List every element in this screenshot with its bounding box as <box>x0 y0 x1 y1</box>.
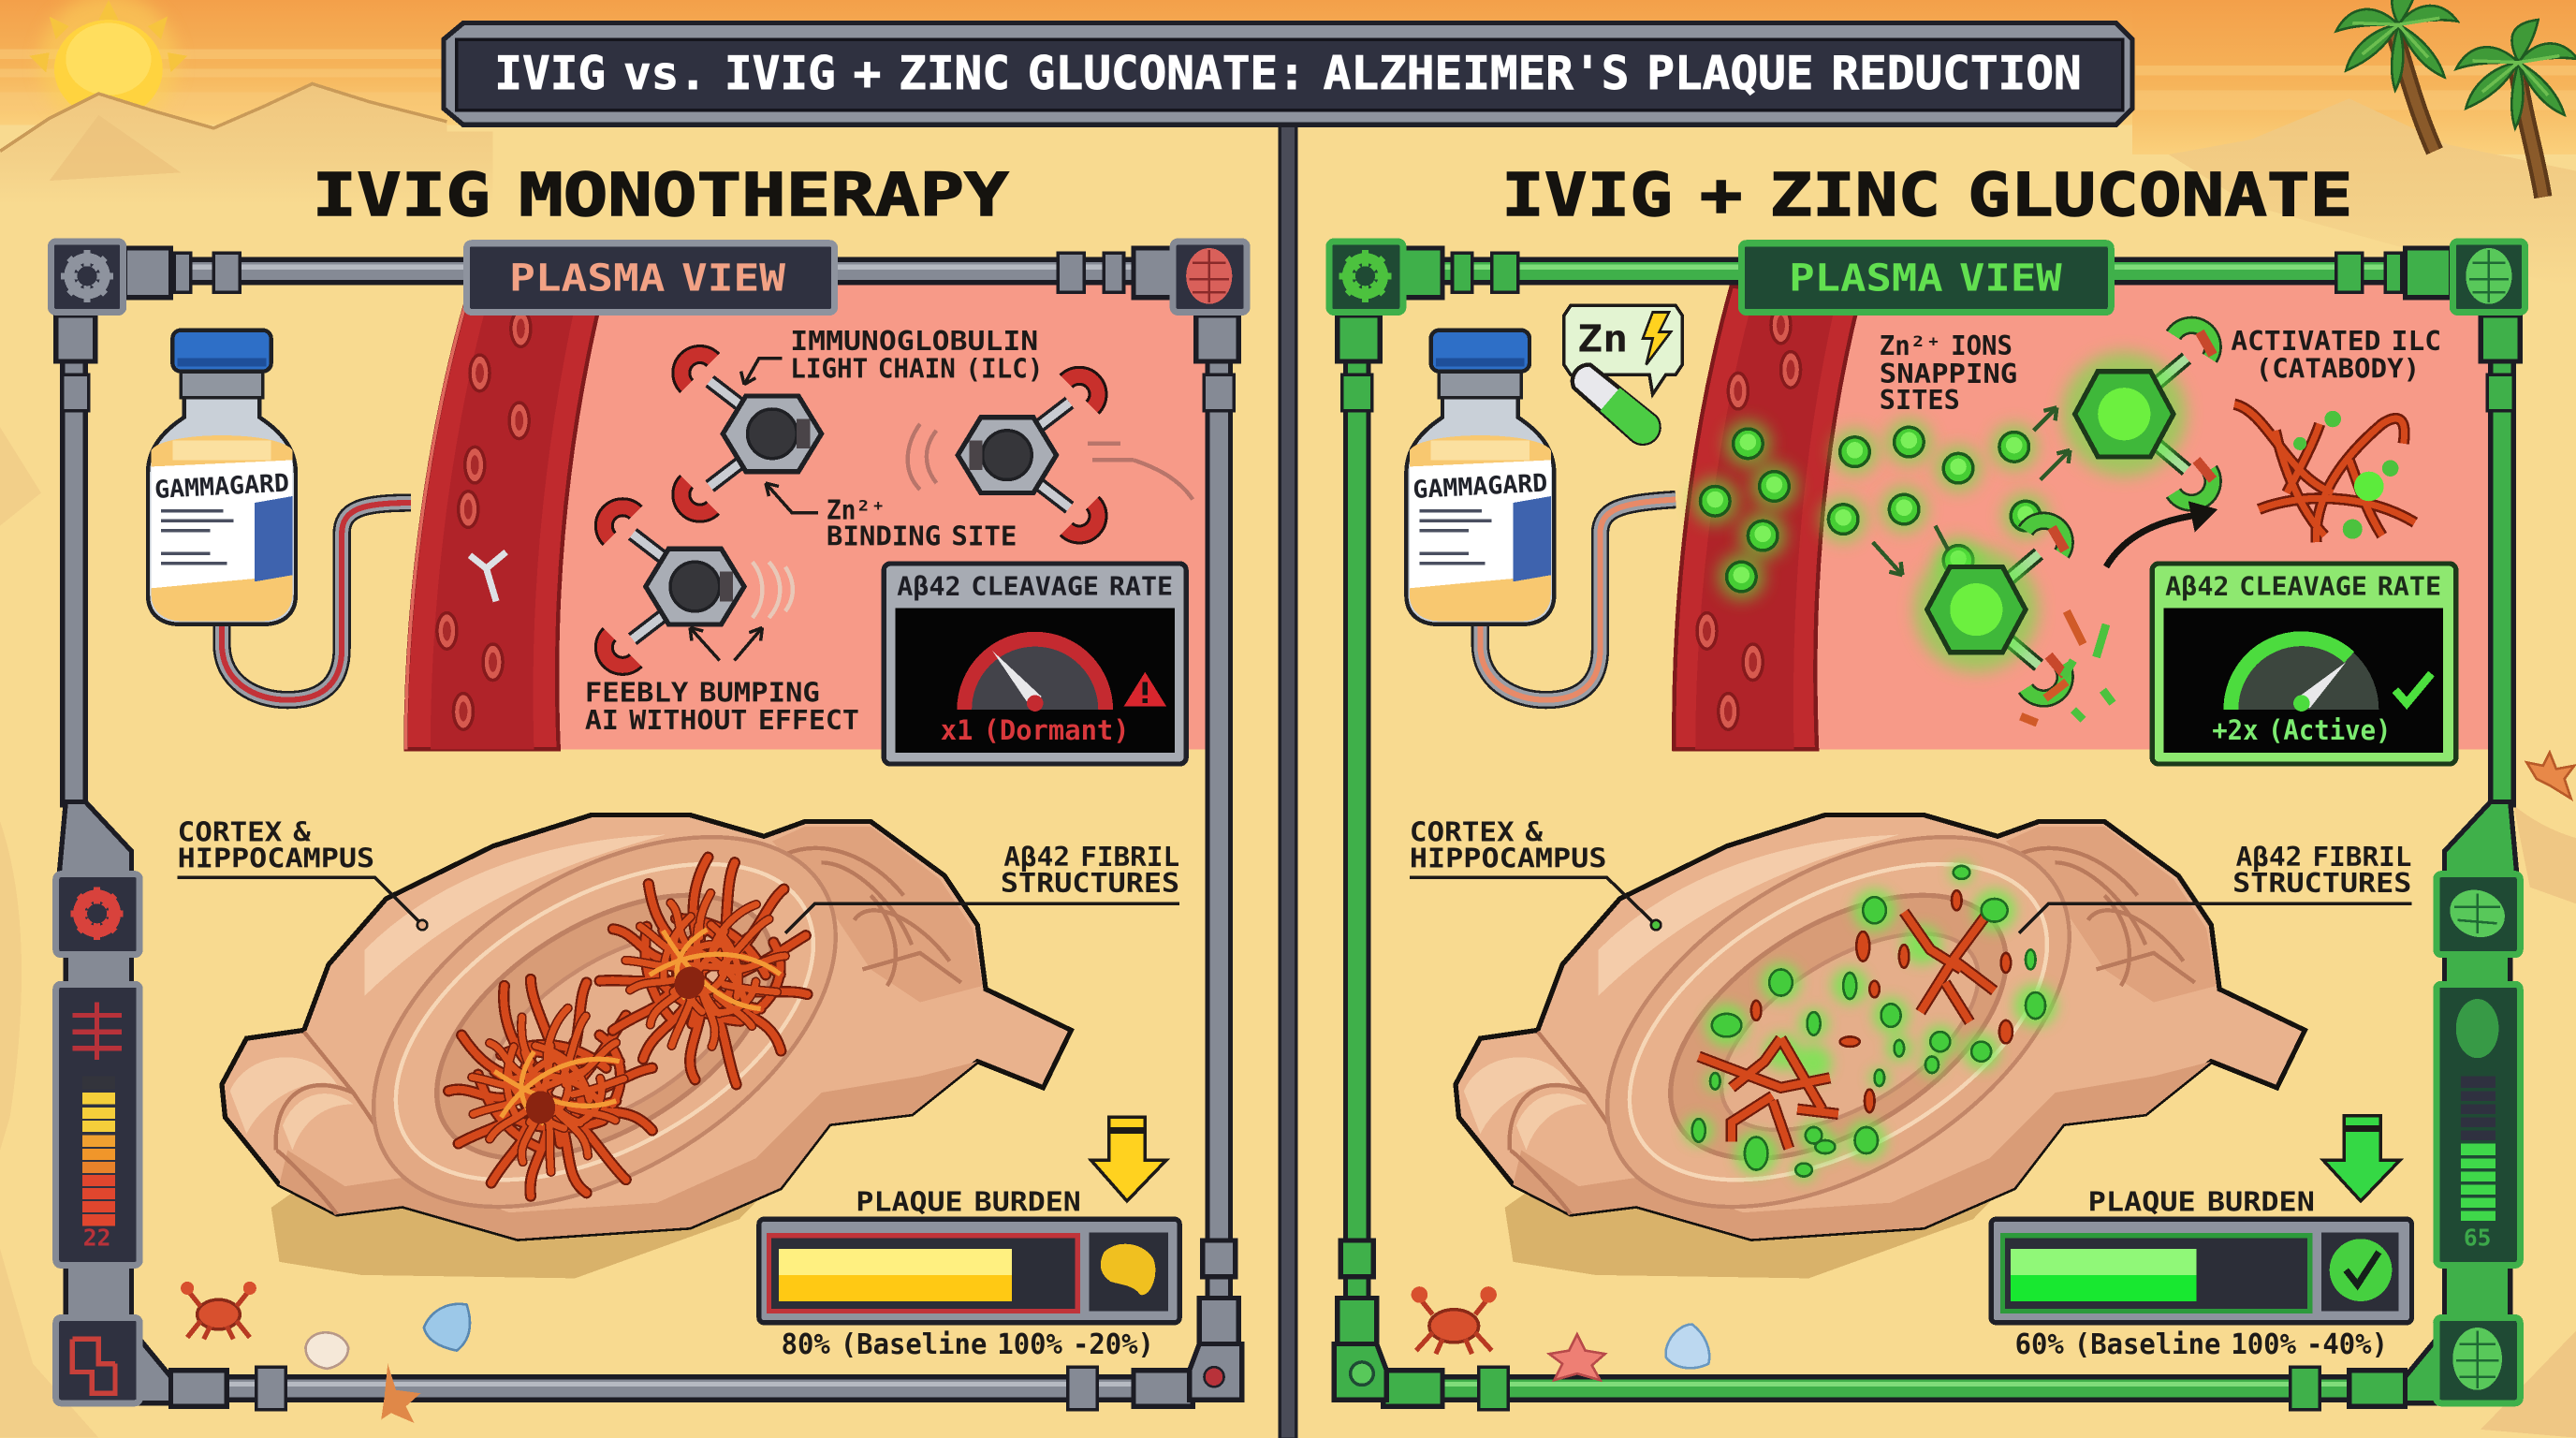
gauge: red level column <box>72 1003 122 1251</box>
icon: check <box>2395 674 2431 703</box>
vial: Gammagard: GAMMAGARD <box>154 470 290 505</box>
title banner <box>444 23 2132 125</box>
labels: plasma: BINDING SITE <box>827 521 1017 552</box>
plaque burden meter: PLAQUE BURDEN <box>2088 1186 2315 1217</box>
labels: plasma <box>585 326 1044 736</box>
label: cortex <box>1410 817 1661 930</box>
background: sunset sky <box>0 0 2576 154</box>
fragment glow <box>1684 861 2056 1181</box>
labels: plasma: ACTIVATED ILC <box>2231 326 2441 357</box>
gauge dial <box>2224 633 2378 712</box>
zinc speech bubble: Zn <box>1577 317 1628 361</box>
icon: warning <box>1123 672 1166 707</box>
molecule: activated ILC bottom <box>1914 521 2065 698</box>
green fragments <box>1692 866 2045 1177</box>
gauge panel: cleavage rate <box>884 564 1186 764</box>
label: cortex: HIPPOCAMPUS <box>178 844 374 874</box>
plasma view label: PLASMA VIEW <box>1789 257 2062 301</box>
plasma background <box>1801 283 2494 749</box>
icon: check badge <box>2330 1239 2392 1301</box>
labels: plasma: SITES <box>1880 385 1960 416</box>
brain with dense plaques <box>222 761 1071 1284</box>
brain with reduced plaques <box>1456 761 2305 1284</box>
icon: setting sun <box>30 0 187 131</box>
labels: plasma: (CATABODY) <box>2256 354 2420 385</box>
panel: IVIG monotherapy <box>51 242 1247 1423</box>
labels: plasma: SNAPPING <box>1880 359 2017 389</box>
icon: small bug <box>1204 1367 1224 1387</box>
labels: plasma: IMMUNOGLOBULIN <box>790 326 1038 357</box>
heading: IVIG monotherapy: IVIG MONOTHERAPY <box>313 160 1009 229</box>
icon: blue shell <box>424 1304 470 1351</box>
vial: Gammagard <box>148 330 296 624</box>
icon: palm tree right <box>2456 20 2576 198</box>
frame: metal pipes <box>51 242 1247 1410</box>
plaque burden meter: 80% (Baseline 100% -20%) <box>782 1328 1154 1361</box>
tube <box>222 503 411 700</box>
icon: starfish <box>381 1364 420 1423</box>
molecule: ILC two <box>908 375 1193 535</box>
icon: green brain <box>2443 883 2511 945</box>
icon: gear <box>61 250 113 302</box>
vial: Gammagard <box>1406 330 1554 624</box>
labels: plasma: LIGHT CHAIN (ILC) <box>790 354 1044 385</box>
plaque burden meter: PLAQUE BURDEN <box>856 1186 1081 1217</box>
label: fibril structures: Aβ42 FIBRIL <box>1003 842 1179 873</box>
labels: plasma <box>1880 326 2441 416</box>
panel: IVIG + zinc gluconate <box>1329 242 2525 1410</box>
background: right dune <box>2169 98 2576 287</box>
red fragments <box>1751 890 2012 1112</box>
plaque burden meter <box>1991 1186 2411 1361</box>
icon: plaque blob <box>1101 1244 1155 1295</box>
label: fibril structures <box>2019 842 2411 933</box>
label: cortex <box>178 817 427 930</box>
icon: pink starfish <box>1549 1334 1605 1380</box>
icon: red circuit <box>72 1339 115 1393</box>
icon: gear <box>1339 250 1392 302</box>
gauge: green level column <box>2456 999 2498 1251</box>
gauge dial <box>958 633 1112 712</box>
molecule: ILC three <box>604 507 793 666</box>
gauge panel: cleavage rate: +2x (Active) <box>2212 714 2392 746</box>
molecule: ILC one <box>681 355 822 513</box>
labels: plasma: Zn²⁺ <box>827 495 886 526</box>
plaque burden meter <box>759 1186 1179 1361</box>
gauge panel: cleavage rate: Aβ42 CLEAVAGE RATE <box>2165 572 2441 601</box>
icon: orange starfish <box>2526 753 2574 799</box>
arrow: green down <box>2323 1116 2400 1201</box>
title text: IVIG vs. IVIG + ZINC GLUCONATE: ALZHEIMER'S PLAQUE REDUCTION <box>494 46 2082 100</box>
label: cortex: HIPPOCAMPUS <box>1410 844 1606 874</box>
gauge panel: cleavage rate: Aβ42 CLEAVAGE RATE <box>897 572 1173 601</box>
vial: Gammagard: GAMMAGARD <box>1412 470 1548 505</box>
label: fibril structures <box>785 842 1179 933</box>
labels: plasma: FEEBLY BUMPING <box>585 677 820 708</box>
icon: green brain bottom <box>2452 1328 2502 1390</box>
icon: antibody in vessel <box>470 552 506 601</box>
icon: red gear <box>71 888 124 940</box>
icon: small green gear <box>1351 1362 1373 1385</box>
divider between panels <box>1280 115 1296 1438</box>
labels: plasma: Zn²⁺ IONS <box>1880 330 2012 361</box>
icon: crab <box>1412 1286 1497 1354</box>
icon: zinc capsule <box>1573 365 1660 444</box>
zinc ions <box>1692 419 2049 600</box>
label: fibril structures: STRUCTURES <box>1001 868 1179 899</box>
cleaved fragments <box>2021 611 2113 723</box>
icon: brain <box>1186 248 1232 304</box>
frame: green pipes <box>1329 242 2525 1410</box>
icon: brain <box>2466 248 2511 304</box>
small green arrows <box>1873 407 2070 575</box>
broken fibrils <box>1699 912 1995 1149</box>
gauge panel: cleavage rate: x1 (Dormant) <box>941 714 1130 746</box>
gauge: red level column: 22 <box>83 1224 110 1251</box>
plasma view label: left panel: PLASMA VIEW <box>509 257 786 301</box>
label: cortex: CORTEX & <box>1410 817 1543 848</box>
plasma view label: left panel <box>466 243 835 312</box>
icon: crab <box>181 1282 256 1339</box>
plasma view label <box>1741 243 2111 312</box>
plaque burden meter: 60% (Baseline 100% -40%) <box>2015 1328 2388 1361</box>
black arrow <box>2106 501 2217 566</box>
tube <box>1480 500 1676 700</box>
labels: plasma: AI WITHOUT EFFECT <box>585 705 859 736</box>
heading: IVIG + zinc gluconate: IVIG + ZINC GLUCONATE <box>1501 160 2352 229</box>
blood vessel <box>406 304 600 749</box>
arrow: yellow down <box>1090 1117 1166 1201</box>
gauge panel: cleavage rate <box>2152 564 2456 764</box>
label: fibril structures: Aβ42 FIBRIL <box>2236 842 2411 873</box>
icon: palm tree left <box>2336 0 2458 151</box>
zinc speech bubble <box>1564 305 1682 394</box>
icon: white shell <box>305 1332 348 1369</box>
blood vessel <box>1674 286 1858 749</box>
label: fibril structures: STRUCTURES <box>2232 868 2411 899</box>
molecule: activated ILC top <box>2062 325 2213 503</box>
gauge: green level column: 65 <box>2464 1224 2491 1251</box>
label: cortex: CORTEX & <box>178 817 311 848</box>
plasma background <box>542 283 1212 749</box>
icon: blue shell <box>1666 1325 1709 1368</box>
broken fibril <box>2234 404 2415 542</box>
